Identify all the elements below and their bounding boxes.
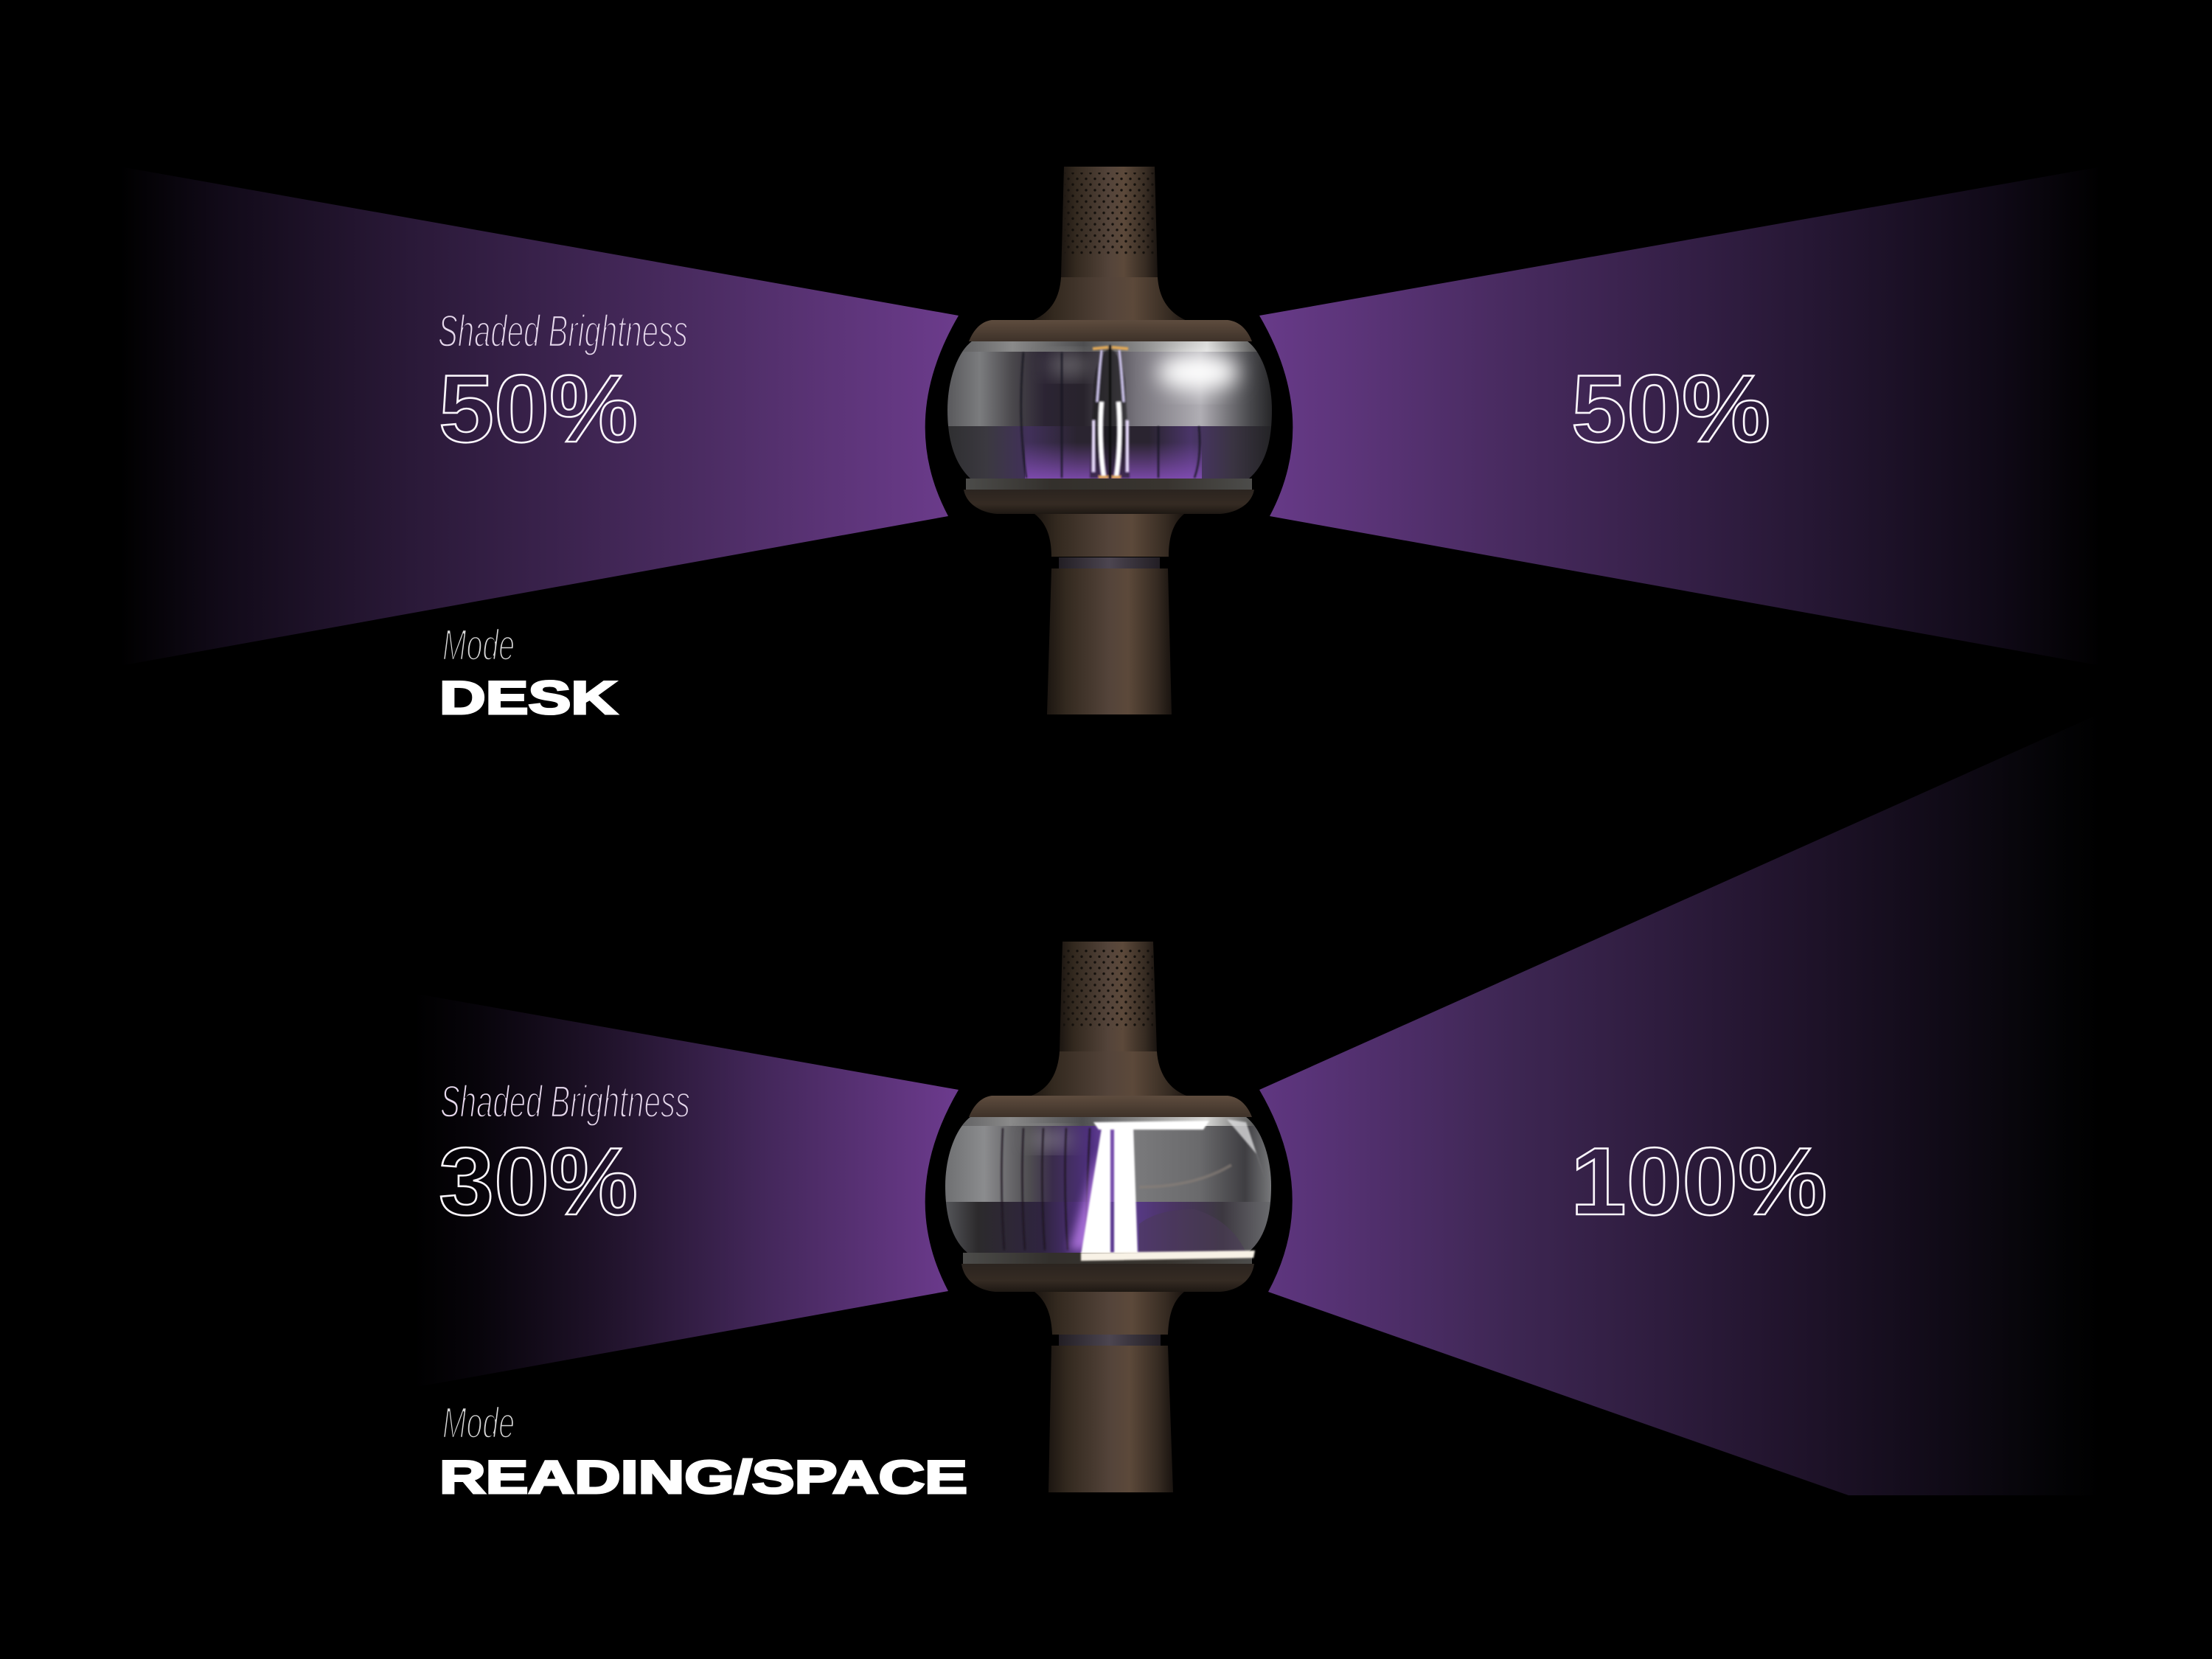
light beam: reading left 30%	[413, 993, 959, 1388]
lamp ring	[1059, 557, 1160, 568]
lamp ring	[1059, 1335, 1161, 1346]
label: mode, reading: Mode	[442, 1399, 515, 1447]
label: shaded brightness, reading: Shaded Brightness	[440, 1077, 690, 1127]
heading: READING/SPACE: READING/SPACE	[439, 1452, 967, 1503]
lamp glass lower lip	[966, 479, 1252, 490]
lamp top disc	[969, 320, 1252, 341]
lamp filament	[1090, 345, 1130, 479]
light beam: desk right 50%	[1259, 167, 2101, 666]
lamp lower neck	[1034, 514, 1184, 557]
light beam: desk left 50%	[120, 167, 959, 666]
lamp flared neck top	[1030, 277, 1189, 321]
panel: reading/space mode	[413, 713, 2101, 1503]
lamp: reading mode	[945, 942, 1271, 1492]
lamp: desk mode	[947, 167, 1272, 714]
lamp bottom disc	[961, 1264, 1254, 1292]
lamp glass lower lip	[963, 1253, 1252, 1264]
lamp base	[1048, 1346, 1173, 1492]
lamp light slot	[1081, 1121, 1209, 1255]
value: right 100%: 100%	[1571, 1127, 1827, 1235]
lamp perforated cap	[1060, 942, 1157, 1051]
panel: desk mode	[120, 167, 2101, 724]
light beam: reading right 100%	[1259, 713, 2101, 1495]
lamp glass globe	[947, 341, 1272, 479]
lamp glass globe	[945, 1117, 1271, 1255]
lamp flared neck top	[1029, 1051, 1189, 1096]
value: left 50%: 50%	[439, 355, 638, 462]
lamp perforated cap	[1061, 167, 1158, 277]
lamp lower neck	[1034, 1292, 1184, 1335]
lamp bright lower bar	[1081, 1251, 1255, 1261]
label: shaded brightness, desk: Shaded Brightness	[438, 306, 688, 356]
value: left 30%: 30%	[439, 1127, 638, 1235]
label: mode, desk: Mode	[442, 621, 515, 669]
lamp bottom disc	[964, 490, 1254, 514]
heading: DESK: DESK	[439, 672, 617, 724]
value: right 50%: 50%	[1571, 355, 1770, 462]
lamp base	[1047, 568, 1172, 714]
lamp top disc	[969, 1096, 1252, 1117]
